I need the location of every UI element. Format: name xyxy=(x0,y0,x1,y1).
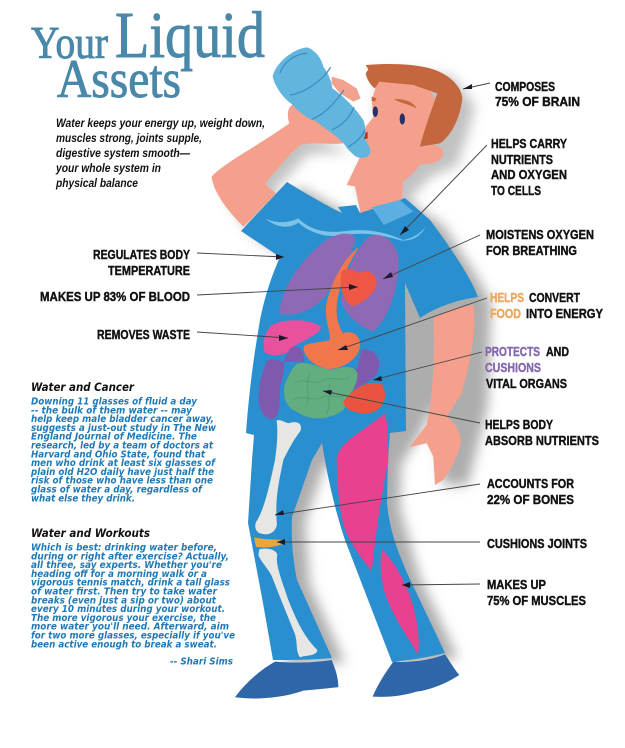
intro text: physical balance xyxy=(55,176,138,190)
article: water and cancer: Downing 11 glasses of fluid a day xyxy=(31,396,197,408)
article: water and workouts xyxy=(31,526,235,668)
article: water and cancer: plain old H2O daily have just half the xyxy=(30,467,214,478)
labels: right side xyxy=(485,79,603,608)
article: water and workouts: every 10 minutes during your workout. xyxy=(31,604,225,615)
mouth xyxy=(362,132,368,140)
figure shadow xyxy=(220,71,491,667)
figure: man drinking water xyxy=(212,47,491,699)
article: water and workouts: heading off for a morning walk or a xyxy=(31,569,207,580)
large intestine xyxy=(259,346,379,419)
ear xyxy=(420,145,443,164)
labels: left side xyxy=(40,247,190,342)
hair xyxy=(366,64,462,147)
article: water and cancer: help keep male bladder cancer away, xyxy=(31,414,214,425)
labels: right side: NUTRIENTS xyxy=(491,152,553,167)
lungs xyxy=(280,234,398,332)
labels: left side: REMOVES WASTE xyxy=(97,327,190,342)
article: water and cancer: suggests a just-out study in The New xyxy=(31,423,217,434)
head xyxy=(273,47,462,190)
hand fingers xyxy=(332,77,361,102)
liver xyxy=(264,320,322,355)
intro text xyxy=(55,116,265,190)
neck xyxy=(355,177,403,214)
labels: right side: TO CELLS xyxy=(491,183,541,198)
title: Your xyxy=(31,18,108,68)
title: Assets xyxy=(57,49,181,109)
arm: raised xyxy=(212,77,361,227)
title xyxy=(31,0,265,109)
labels: left side: TEMPERATURE xyxy=(108,263,190,278)
labels: right side: HELPS CARRY xyxy=(491,136,567,151)
labels: left side: MAKES UP 83% OF BLOOD xyxy=(40,289,190,304)
labels: right side: ABSORB NUTRIENTS xyxy=(485,433,599,448)
article: water and workouts: more water you'll need. Afterward, aim xyxy=(31,622,229,633)
article: water and cancer: what else they drink. xyxy=(31,493,135,504)
labels: right side: HELPS xyxy=(490,290,524,305)
arm: lowered with hand xyxy=(409,305,474,485)
article: water and cancer: risk of those who have less than one xyxy=(31,476,213,487)
shirt and pants xyxy=(241,182,478,662)
thigh bone xyxy=(254,420,317,657)
labels: right side: CONVERT xyxy=(529,290,580,305)
article: water and cancer xyxy=(30,380,217,504)
article: water and workouts: Which is best: drinking water before, xyxy=(31,542,217,554)
article: water and cancer: -- the bulk of them water -- may xyxy=(31,405,192,416)
collar xyxy=(265,200,426,241)
labels: left side: REGULATES BODY xyxy=(93,247,190,262)
article: water and workouts: all three, say experts. Whether you're xyxy=(31,560,222,571)
labels: right side: HELPS BODY xyxy=(485,417,553,432)
article: water and workouts: been active enough to break a sweat. xyxy=(31,639,217,650)
labels: right side: VITAL ORGANS xyxy=(486,376,567,391)
article: water and workouts: The more vigorous your exercise, the xyxy=(31,613,216,624)
labels: right side: CUSHIONS JOINTS xyxy=(487,536,587,551)
shoes xyxy=(235,654,459,699)
shin bone xyxy=(258,549,317,657)
labels: right side: 75% OF BRAIN xyxy=(495,94,580,109)
article: water and workouts: breaks (even just a sip or two) about xyxy=(31,595,217,606)
labels: right side: MAKES UP xyxy=(487,577,546,592)
labels: right side: AND OXYGEN xyxy=(491,167,567,182)
article: water and cancer: men who drink at least six glasses of xyxy=(31,458,216,469)
small intestine xyxy=(284,363,357,418)
labels: right side: INTO ENERGY xyxy=(526,306,603,321)
article: water and workouts: vigorous tennis match, drink a tall glass xyxy=(31,578,230,589)
article: water and workouts: Water and Workouts xyxy=(31,526,150,540)
bottle xyxy=(273,47,370,158)
face xyxy=(347,80,440,190)
labels: right side: FOR BREATHING xyxy=(486,243,577,258)
labels: right side: COMPOSES xyxy=(495,79,555,94)
intro text: digestive system smooth— xyxy=(56,146,191,160)
knee cartilage xyxy=(254,537,283,547)
article: water and workouts: of water first. Then try to take water xyxy=(31,586,218,598)
labels: right side: CUSHIONS xyxy=(485,360,541,375)
water wave xyxy=(265,218,426,241)
arrows xyxy=(197,83,490,588)
muscles xyxy=(337,413,419,655)
article: water and cancer: Water and Cancer xyxy=(31,380,135,394)
article: water and cancer: England Journal of Medicine. The xyxy=(31,432,197,443)
intro text: Water keeps your energy up, weight down, xyxy=(56,116,265,130)
esophagus and stomach xyxy=(304,248,360,369)
kidney xyxy=(343,383,385,413)
intro text: muscles strong, joints supple, xyxy=(56,131,202,145)
labels: right side: 22% OF BONES xyxy=(487,492,574,507)
article: water and cancer: Harvard and Ohio State, found that xyxy=(31,449,206,460)
intro text: your whole system in xyxy=(55,161,161,175)
article: water and cancer: glass of water a day, regardless of xyxy=(31,484,203,496)
labels: right side: PROTECTS xyxy=(485,344,540,359)
heart xyxy=(341,269,377,306)
labels: right side: ACCOUNTS FOR xyxy=(487,476,575,491)
title: Liquid xyxy=(115,0,265,72)
eyes and brow xyxy=(373,106,378,117)
labels: right side: FOOD xyxy=(490,306,521,321)
article: water and workouts: for two more glasses, especially if you've xyxy=(31,630,235,642)
article: water and workouts: during or right after exercise? Actually, xyxy=(31,551,229,562)
labels: right side: MOISTENS OXYGEN xyxy=(486,227,594,242)
article: water and cancer: research, led by a team of doctors at xyxy=(31,440,214,452)
byline: -- Shari Sims xyxy=(170,656,233,668)
labels: right side: AND xyxy=(546,344,569,359)
labels: right side: 75% OF MUSCLES xyxy=(487,593,586,608)
